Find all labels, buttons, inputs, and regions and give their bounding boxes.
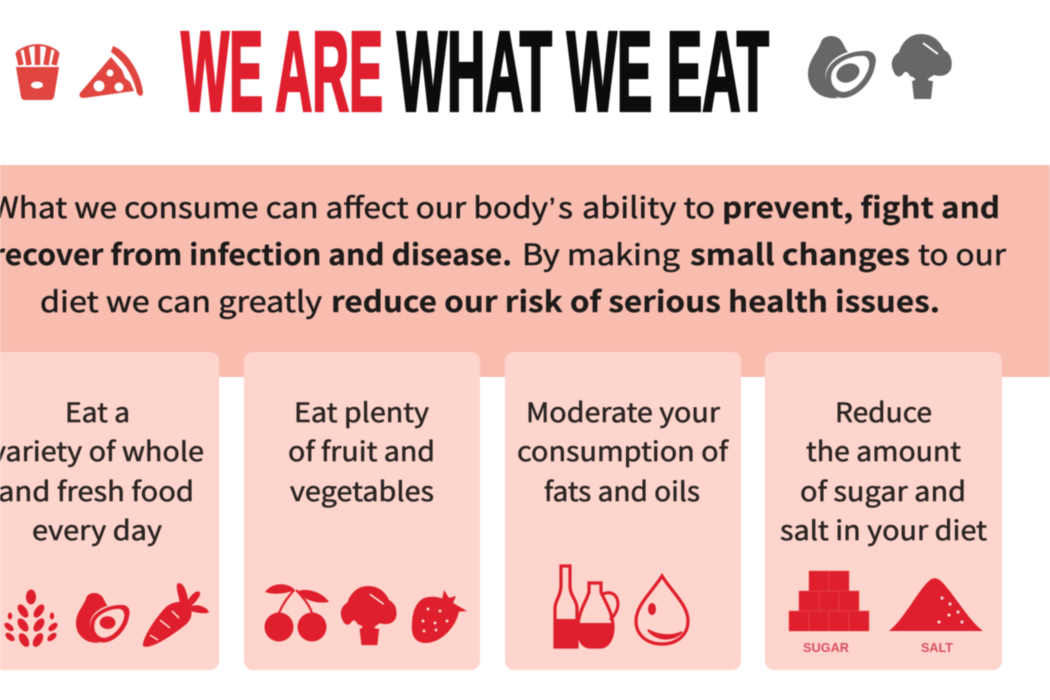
card 4 text: of sugar and bbox=[800, 470, 966, 509]
icon: cherries bbox=[264, 584, 329, 642]
panel: card 3 fats and oils bbox=[505, 352, 741, 670]
card 3 text: fats and oils bbox=[544, 470, 700, 509]
icon: salt pile bbox=[889, 578, 983, 631]
icon: red broccoli bbox=[341, 586, 397, 645]
icon: grey avocado bbox=[808, 36, 876, 98]
card 1 text: Eat a bbox=[65, 391, 130, 430]
intro text: diet we can greatly bbox=[40, 279, 322, 321]
intro text: recover from infection and disease. bbox=[0, 232, 512, 274]
intro text: reduce our risk of serious health issues. bbox=[331, 279, 940, 321]
intro text: ’ bbox=[549, 193, 555, 225]
icon: red avocado bbox=[76, 593, 130, 643]
intro text: What we consume can affect our body bbox=[0, 185, 548, 227]
icon: oil drop bbox=[636, 576, 688, 644]
icon: oil bottle bbox=[555, 566, 577, 648]
card 4 text: Reduce bbox=[835, 391, 932, 430]
intro text: ability to bbox=[582, 185, 715, 227]
intro text: By making bbox=[522, 232, 680, 274]
card 3 text: consumption of bbox=[517, 430, 730, 469]
card 2 text: Eat plenty bbox=[294, 391, 429, 430]
intro text: s bbox=[558, 185, 573, 227]
card 3 text bbox=[517, 391, 730, 509]
card 1 text bbox=[0, 391, 204, 548]
card 4 text: the amount bbox=[806, 430, 961, 469]
icon: sugar cubes bbox=[789, 571, 869, 631]
icon: carrot bbox=[143, 583, 209, 647]
icon: grey broccoli bbox=[892, 34, 952, 99]
icon: strawberry bbox=[412, 590, 467, 643]
panel: card 1 whole food bbox=[0, 352, 219, 670]
card 2 text: of fruit and bbox=[288, 430, 435, 469]
card 4 text: salt in your diet bbox=[780, 509, 987, 548]
title: WE ARE bbox=[181, 8, 383, 134]
card 4 text bbox=[780, 391, 987, 548]
icon: french fries bbox=[16, 45, 59, 100]
card 3 text: Moderate your bbox=[526, 391, 721, 430]
panel: card 4 sugar and salt bbox=[765, 352, 1002, 670]
icon: oil jug bbox=[578, 583, 618, 647]
intro text: small changes bbox=[690, 232, 910, 274]
card 2 text bbox=[288, 391, 435, 509]
intro text bbox=[0, 185, 1007, 321]
intro text: to our bbox=[918, 232, 1007, 274]
card 1 text: every day bbox=[32, 509, 162, 548]
card 2 text: vegetables bbox=[290, 470, 434, 509]
label: salt: SALT bbox=[921, 641, 953, 655]
panel: card 2 fruit and vegetables bbox=[244, 352, 480, 670]
icon: wheat bbox=[3, 590, 59, 649]
card 1 text: and fresh food bbox=[0, 470, 194, 509]
panel: intro band bbox=[0, 165, 1050, 377]
label: sugar: SUGAR bbox=[803, 641, 849, 655]
icon: pizza slice bbox=[80, 46, 143, 98]
intro text: prevent, fight and bbox=[722, 185, 1000, 227]
